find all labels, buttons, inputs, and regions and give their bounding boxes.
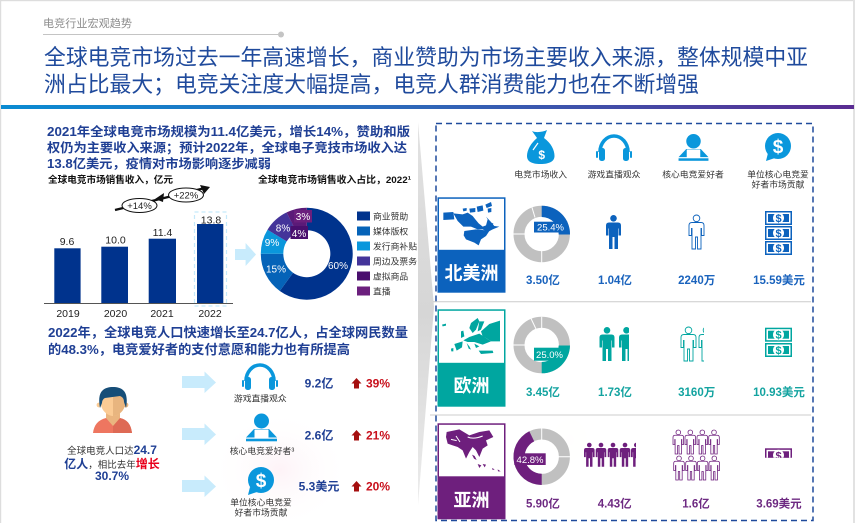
values: Asia: 3.69美元 <box>756 496 802 510</box>
bar chart: 13.8 <box>201 214 221 226</box>
label: per-fan contribution <box>747 168 809 190</box>
values: North America <box>526 273 805 287</box>
bar chart: 2022 <box>198 308 222 320</box>
row: core fans: 2.6亿 <box>305 428 333 442</box>
donut chart: revenue share: 9% <box>265 238 279 249</box>
bar chart: 11.4 <box>153 227 172 239</box>
icon: headphones <box>596 136 632 161</box>
icon: Europe bills: $ <box>775 330 782 342</box>
bar chart: 10.0 <box>105 234 126 246</box>
global population caption: 30.7% <box>95 469 129 483</box>
values: Europe <box>526 385 805 399</box>
row: per-fan contribution: 单位核心电竞爱 <box>230 496 292 508</box>
row: core fans <box>230 414 390 456</box>
global population caption <box>64 443 160 483</box>
label: per-fan contribution: 好者市场贡献 <box>752 178 805 190</box>
region card: Europe <box>438 309 506 407</box>
donut legend: 周边及票务 <box>373 256 417 266</box>
values: Asia: 4.43亿 <box>598 496 632 510</box>
section label: 电竞行业宏观趋势 <box>43 16 132 30</box>
icon: North America bills: $ <box>775 243 782 255</box>
icon: dollar bubble: $ <box>773 137 784 158</box>
icon: money bag: $ <box>538 148 545 162</box>
values: Europe: 3160万 <box>678 386 715 399</box>
icon: core fan <box>679 134 708 161</box>
title: 全球电竞市场过去一年高速增长，商业赞助为市场主要收入来源，整体规模中亚 <box>44 45 808 70</box>
row: Asia <box>438 423 802 519</box>
audience summary text: 2022年，全球电竞人口快速增长至24.7亿人，占全球网民数量 <box>48 325 408 340</box>
growth arrows: +22% <box>174 190 199 202</box>
row: live viewers: 39% <box>366 376 390 390</box>
icon: esports person avatar <box>93 387 132 433</box>
row: core fans: 核心电竞爱好者³ <box>230 445 294 456</box>
donut: North America 25.4% <box>513 206 570 262</box>
donut chart: revenue share: 3% <box>296 212 310 223</box>
bar chart: 9.6 <box>60 236 74 248</box>
bar chart: 2021 <box>150 308 174 320</box>
donut legend <box>357 210 417 296</box>
icon: Asia viewers <box>584 443 642 467</box>
market summary text: 2021年全球电竞市场规模为11.4亿美元，增长14%，赞助和版 <box>47 124 410 139</box>
row: per-fan contribution: $ <box>256 471 267 492</box>
donut: Asia 42.8%: 42.8% <box>517 455 544 466</box>
icon: North America bills: $ <box>775 228 782 240</box>
icon: Europe core fans <box>680 326 704 362</box>
bar chart <box>44 212 233 320</box>
donut: Europe 25.0% <box>513 317 570 373</box>
donut chart: revenue share: 60% <box>328 261 348 272</box>
icon: money bag <box>527 130 554 164</box>
market summary text: 13.8亿美元，疫情对市场影响逐步减弱 <box>47 156 271 171</box>
region card: Europe: 欧洲 <box>454 375 490 396</box>
growth arrows <box>115 185 210 212</box>
values: North America: 15.59美元 <box>753 273 805 287</box>
donut: North America 25.4%: 25.4% <box>537 222 565 234</box>
audience summary text <box>48 325 408 357</box>
arrow: to per-fan contribution <box>182 476 216 497</box>
values: Asia: 1.6亿 <box>682 496 710 510</box>
values: North America: 2240万 <box>678 274 715 287</box>
region card: Asia <box>438 423 506 519</box>
donut chart: revenue share: 15% <box>266 264 286 276</box>
section label <box>43 16 284 38</box>
arrow: to core fans <box>182 424 216 445</box>
values: North America: 3.50亿 <box>526 273 560 287</box>
row: live viewers <box>234 365 390 404</box>
row: per-fan contribution: 好者市场贡献 <box>235 506 288 518</box>
row: live viewers: 9.2亿 <box>305 376 333 390</box>
row: per-fan contribution: 5.3美元 <box>299 478 339 494</box>
donut legend: 商业赞助 <box>373 210 408 222</box>
global population caption: 全球电竞人口达24.7 <box>67 443 157 457</box>
growth arrows: +14% <box>127 201 152 212</box>
row: per-fan contribution <box>230 467 390 518</box>
label: core fans: 核心电竞爱好者 <box>662 168 724 180</box>
donut: Asia 42.8% <box>513 428 570 485</box>
donut legend: 直播 <box>373 286 391 296</box>
icon: North America viewers <box>606 215 621 249</box>
region card: North America: 北美洲 <box>444 262 498 284</box>
global population caption: 亿人，相比去年增长 <box>64 456 160 471</box>
label: market revenue: 电竞市场收入 <box>514 168 567 180</box>
icon: North America bills <box>765 211 792 255</box>
gradient divider <box>1 105 854 109</box>
row: live viewers: 游戏直播观众 <box>234 392 287 404</box>
arrow: to live viewers <box>182 372 216 393</box>
audience summary text: 的48.3%，电竞爱好者的支付意愿和能力也有所提高 <box>48 342 350 357</box>
values: Europe: 1.73亿 <box>598 385 632 399</box>
donut legend: 发行商补贴 <box>373 240 417 252</box>
icon: North America bills: $ <box>775 213 782 225</box>
bar chart: 2020 <box>104 308 127 320</box>
row: core fans: 21% <box>366 428 390 442</box>
market summary text: 权仍为主要收入来源；预计2022年，全球电子竞技市场收入达 <box>47 140 407 156</box>
donut chart: revenue share: 4% <box>292 229 306 240</box>
icon: Europe bills <box>765 328 792 357</box>
icon: Asia bill: $ <box>775 450 782 462</box>
donut legend: 媒体版权 <box>373 226 408 236</box>
row: per-fan contribution: 20% <box>366 480 390 494</box>
row: North America <box>438 197 805 293</box>
donut chart: revenue share: 8% <box>276 224 290 234</box>
icon: North America core fans <box>689 215 704 249</box>
panel: regional comparison <box>430 124 813 520</box>
donut chart heading: 全球电竞市场销售收入占比，2022¹ <box>258 174 411 186</box>
values: Europe: 3.45亿 <box>526 385 560 399</box>
region card: Asia: 亚洲 <box>454 490 490 510</box>
title: 洲占比最大；电竞关注度大幅提高，电竞人群消费能力也在不断增强 <box>44 72 699 97</box>
row: Europe <box>438 309 805 407</box>
icon: Asia bill <box>765 448 792 458</box>
icon: Europe viewers <box>600 327 629 361</box>
icon: Asia core fans <box>673 430 720 480</box>
values: Europe: 10.93美元 <box>753 385 805 399</box>
values: North America: 1.04亿 <box>598 273 632 287</box>
region card: North America <box>438 197 506 293</box>
donut: Europe 25.0%: 25.0% <box>536 350 564 361</box>
title <box>44 45 808 97</box>
label: per-fan contribution: 单位核心电竞爱 <box>747 168 809 180</box>
market summary text <box>47 124 410 171</box>
bar chart heading: 全球电竞市场销售收入，亿元 <box>48 174 173 186</box>
donut legend: 虚拟商品 <box>373 270 408 282</box>
icon: dollar bubble <box>765 133 791 161</box>
bar chart: 2019 <box>56 308 80 320</box>
icon: Europe bills: $ <box>775 345 782 357</box>
donut chart: revenue share <box>261 208 353 300</box>
label: live viewers: 游戏直播观众 <box>588 168 641 180</box>
values: Asia <box>526 496 802 510</box>
values: Asia: 5.90亿 <box>526 496 560 510</box>
arrow: bars to donut <box>235 243 256 266</box>
